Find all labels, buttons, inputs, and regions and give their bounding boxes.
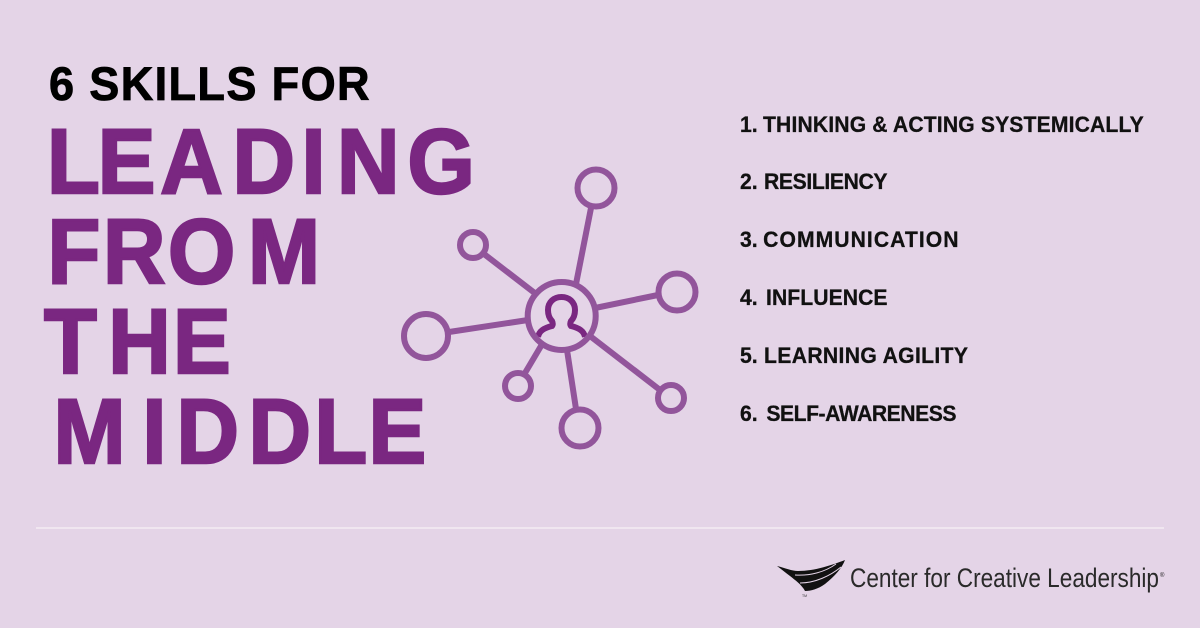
skill 1: THINKING & ACTING SYSTEMICALLY <box>763 111 1144 137</box>
skill 6: SELF-AWARENESS <box>766 400 956 426</box>
skill 5: 5. <box>740 342 758 368</box>
registered mark: ® <box>1160 572 1165 579</box>
skill 2: 2. <box>740 168 758 194</box>
icon: network with person at centre <box>404 170 696 446</box>
heading: leading from the middle: LEADING <box>47 110 475 213</box>
heading: leading from the middle: THE <box>44 290 231 393</box>
skill 3: COMMUNICATION <box>763 226 959 252</box>
skill 5: LEARNING AGILITY <box>764 342 968 368</box>
icon: person <box>538 297 585 337</box>
skill 2: RESILIENCY <box>764 168 888 194</box>
heading: leading from the middle: MIDDLE <box>53 380 426 483</box>
skill 3: 3. <box>740 226 758 252</box>
logo: Center for Creative Leadership <box>777 560 1165 598</box>
heading: leading from the middle <box>44 110 475 483</box>
skill 6: 6. <box>740 400 758 426</box>
heading: 6 skills for: 6 SKILLS FOR <box>49 57 370 110</box>
skills list <box>740 111 1144 426</box>
skill 4: INFLUENCE <box>766 284 888 310</box>
skill 4: 4. <box>740 284 758 310</box>
title <box>44 57 475 483</box>
skill 1: 1. <box>740 111 758 137</box>
icon: feather mark <box>777 560 845 591</box>
heading: leading from the middle: FROM <box>47 200 320 303</box>
logo trademark: TM <box>802 594 807 598</box>
